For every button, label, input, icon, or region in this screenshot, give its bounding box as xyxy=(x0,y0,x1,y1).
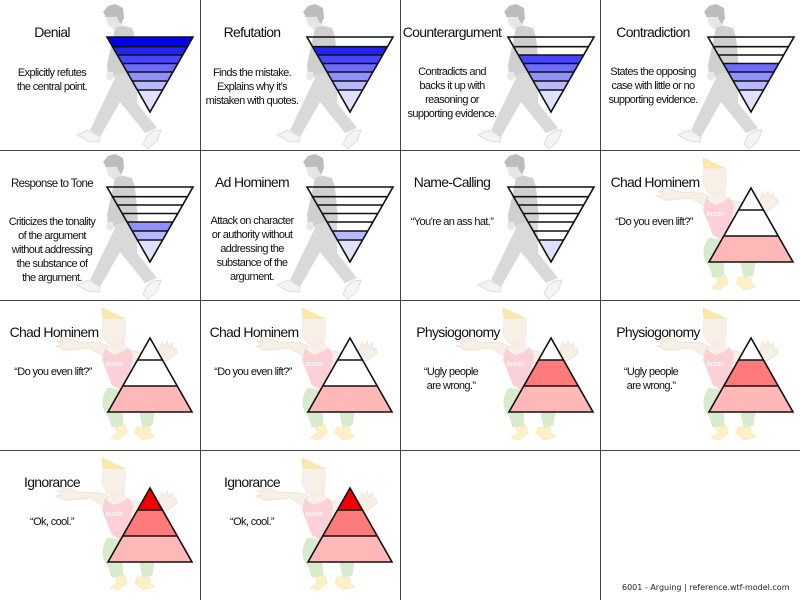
description: substance of the xyxy=(217,257,288,269)
description: supporting evidence. xyxy=(608,94,698,106)
panel: Ad Hominem xyxy=(210,154,393,299)
figure: muscular man xyxy=(56,308,177,440)
description: “You’re an ass hat.” xyxy=(411,216,494,228)
description: Criticizes the tonality xyxy=(9,216,95,228)
description: Explains why it’s xyxy=(217,81,288,93)
heading: Response to Tone xyxy=(11,178,93,190)
heading: Counterargument xyxy=(403,24,502,40)
description: or authority without xyxy=(212,229,293,241)
quote: are wrong.” xyxy=(427,380,476,392)
pyramid: base level pink xyxy=(709,188,793,262)
description: the central point. xyxy=(17,81,88,93)
heading: Ignorance xyxy=(224,474,281,490)
panel: Chad Hominem 1 xyxy=(611,158,793,290)
description: reasoning or xyxy=(425,94,480,106)
quote: “Do you even lift?” xyxy=(615,216,694,228)
figure: muscular man xyxy=(56,458,177,590)
heading: Name-Calling xyxy=(414,174,490,190)
description: backs it up with xyxy=(419,80,485,92)
heading: Contradiction xyxy=(616,24,690,40)
figure: muscular man xyxy=(256,458,377,590)
inverted pyramid: five levels blue xyxy=(508,37,594,112)
figure: walking man xyxy=(277,154,361,299)
description: argument. xyxy=(230,271,275,283)
panel: Name-Calling xyxy=(411,154,594,299)
heading: Physiogonomy xyxy=(416,324,500,340)
description: Explicitly refutes xyxy=(18,67,86,79)
quote: “Ugly people xyxy=(624,366,678,378)
quote: “Do you even lift?” xyxy=(14,366,93,378)
panel: Physiogonomy 2 xyxy=(616,308,793,440)
description: of the argument xyxy=(18,230,86,242)
heading: Chad Hominem xyxy=(10,324,98,340)
figure: walking man xyxy=(478,4,562,149)
description: addressing the xyxy=(220,243,284,255)
heading: Chad Hominem xyxy=(210,324,298,340)
heading: Refutation xyxy=(224,24,280,40)
pyramid: all levels red xyxy=(308,488,392,562)
description: mistaken with quotes. xyxy=(206,95,299,107)
description: Finds the mistake. xyxy=(213,67,291,79)
heading: Chad Hominem xyxy=(611,174,699,190)
description: Contradicts and xyxy=(418,66,486,78)
pyramid: base level pink xyxy=(308,338,392,412)
description: Attack on character xyxy=(210,215,294,227)
figure: walking man xyxy=(77,4,161,149)
panel: Refutation xyxy=(206,4,393,149)
pyramid: base level pink xyxy=(108,338,192,412)
quote: “Ugly people xyxy=(424,366,478,378)
description: case with little or no xyxy=(612,80,695,92)
quote: are wrong.” xyxy=(627,380,676,392)
heading: Physiogonomy xyxy=(616,324,700,340)
quote: “Do you even lift?” xyxy=(214,366,293,378)
figure: muscular man xyxy=(256,308,377,440)
panel: Ignorance 2 xyxy=(224,458,392,590)
description: the argument. xyxy=(22,272,82,284)
figure: muscular man xyxy=(457,308,578,440)
pyramid: all levels red xyxy=(108,488,192,562)
panel: Ignorance 1 xyxy=(24,458,192,590)
figure: muscular man xyxy=(657,158,778,290)
inverted pyramid: six levels blue xyxy=(307,37,393,112)
figure: walking man xyxy=(478,154,562,299)
panel: Contradiction xyxy=(608,4,794,149)
description: without addressing xyxy=(11,244,93,256)
heading: Ignorance xyxy=(24,474,81,490)
figure: walking man xyxy=(77,154,161,299)
figure: walking man xyxy=(277,4,361,149)
inverted pyramid: two levels blue xyxy=(307,187,393,262)
panel: Denial xyxy=(17,4,193,149)
heading: Denial xyxy=(34,24,70,40)
inverted pyramid: three levels blue xyxy=(107,187,193,262)
pyramid: two levels red xyxy=(509,338,593,412)
panel: Chad Hominem 3 xyxy=(210,308,392,440)
description: States the opposing xyxy=(610,66,696,78)
figure: muscular man xyxy=(657,308,778,440)
description: the substance of xyxy=(17,258,89,270)
panel: Physiogonomy 1 xyxy=(416,308,593,440)
figure: walking man xyxy=(678,4,762,149)
pyramid: two levels red xyxy=(709,338,793,412)
quote: “Ok, cool.” xyxy=(230,516,275,528)
quote: “Ok, cool.” xyxy=(30,516,75,528)
panel: Counterargument xyxy=(403,4,594,149)
inverted pyramid: four levels blue xyxy=(708,37,794,112)
panel: Chad Hominem 2 xyxy=(10,308,192,440)
footer credit: 6001 - Arguing | reference.wtf-model.com xyxy=(622,583,790,592)
heading: Ad Hominem xyxy=(215,174,289,190)
inverted pyramid: one level blue xyxy=(508,187,594,262)
inverted pyramid: all levels blue xyxy=(107,37,193,112)
description: supporting evidence. xyxy=(407,108,497,120)
panel: Response to Tone xyxy=(9,154,193,299)
